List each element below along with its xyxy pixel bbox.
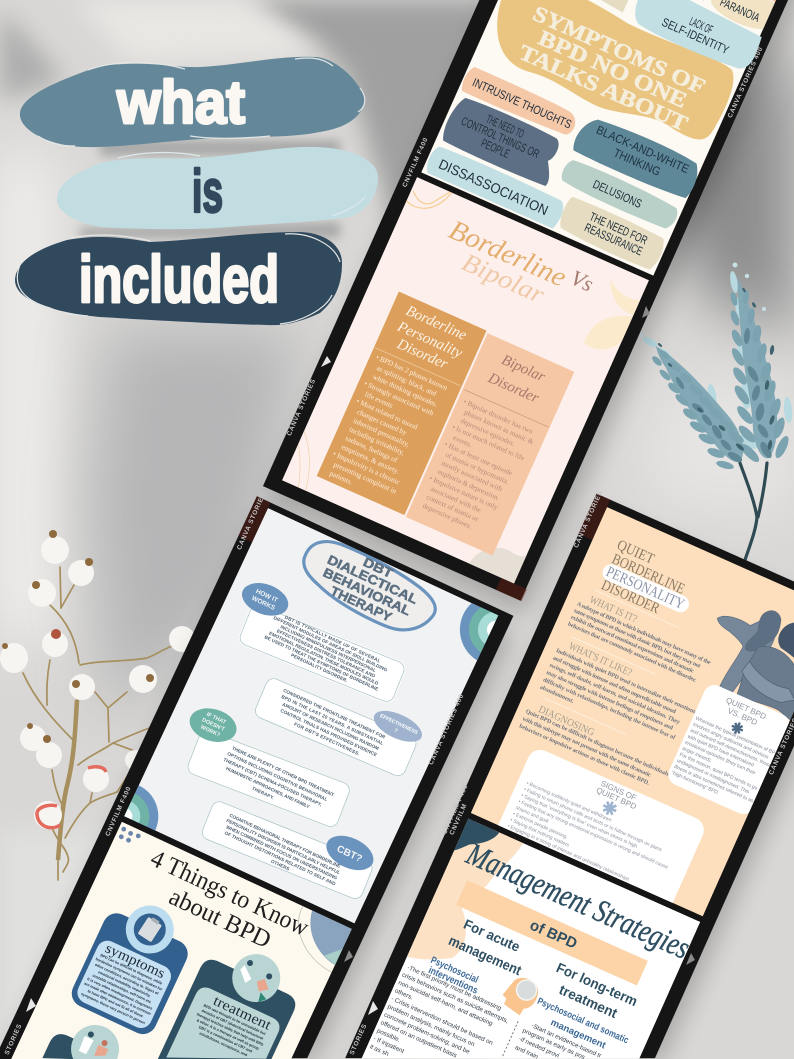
tag: the need to control things or people <box>439 93 566 188</box>
illustration: branch with white berries <box>0 530 195 880</box>
film strip: symptoms and borderline vs bipolar pages <box>258 0 794 616</box>
title <box>600 540 689 614</box>
card: treatment <box>158 933 310 1059</box>
pill: CBT: CBT? <box>335 844 364 865</box>
card: CBT: PERSONALITY DISORDER IS PARTICULARLY HELPFUL <box>226 818 341 875</box>
column: acute management: crisis behaviors such as suicide attempts, <box>401 971 510 1025</box>
section: diagnosing: DIAGNOSING <box>537 704 596 739</box>
tag: dissassociation <box>423 143 568 230</box>
panel: quiet borderline personality disorder <box>461 507 794 939</box>
card: quiet BPD vs BPD: and outward self-destructiveness, those <box>689 728 772 769</box>
column: borderline personality disorder: sadness, feelings of <box>344 434 399 465</box>
column: bipolar disorder: depressive phases. <box>421 502 473 531</box>
card: signs of quiet BPD: • Feeling that any strong emotional expression is wrong and should cause <box>517 799 669 871</box>
pill: effectiveness: ? <box>393 728 398 734</box>
section: what is it: WHAT IS IT? <box>588 595 639 625</box>
card: symptoms <box>67 889 202 1039</box>
card: quiet BPD vs BPD: VS. BPD <box>726 706 759 727</box>
pill: if that doesn't work <box>181 697 245 754</box>
card: signs of quiet BPD: • Saying that “everything is fine” even when stress is high <box>520 793 638 850</box>
column: borderline personality disorder <box>317 292 487 515</box>
column: borderline personality disorder: • Most related to mood <box>355 397 419 432</box>
tag: the need for reassurance: THE NEED FOR <box>587 209 650 248</box>
card: quiet BPD vs BPD: involves angry outbursts and obvious <box>692 722 770 761</box>
title: about BPD <box>165 883 275 954</box>
tag: black-and-white thinking <box>570 112 704 202</box>
card: effectiveness: FOR DBT'S EFFECTIVENESS. <box>293 722 361 757</box>
woman in front: torso <box>736 646 794 720</box>
card: symptoms: are made after adolescence, it is common <box>83 981 152 1016</box>
card: quiet BPD vs BPD: emotional episodes (they turn their <box>684 740 757 777</box>
card: how it works: INCLUDING MINDFULNESS INTERPERSONAL <box>280 624 377 673</box>
icon: clipboard <box>137 914 163 943</box>
column: borderline personality disorder: • Impulsivity is a chronic <box>332 450 401 487</box>
column: bipolar disorder: • Has at least one episode <box>443 440 514 477</box>
section: what's it like: difficulty with relationships, including the intense fear of <box>542 677 677 742</box>
column: borderline personality disorder: life events <box>364 390 394 410</box>
film strip edge labels: STORIES <box>4 1023 24 1056</box>
tag: the need for reassurance: REASSURANCE <box>582 220 645 258</box>
panel: DBT dialectical behavioral therapy <box>124 508 498 924</box>
column: acute management: - Crisis intervention should be based on <box>390 995 494 1047</box>
panel: borderline vs bipolar <box>282 177 649 584</box>
card: quiet BPD vs BPD: For this reason, quiet BPD tends to go <box>678 752 758 792</box>
band: of BPD <box>456 880 648 986</box>
card: signs of quiet BPD: SIGNS OF <box>599 779 638 803</box>
card: symptoms: other conditions, according to. Signs of <box>94 963 160 996</box>
column: bipolar disorder: associated with the <box>429 485 482 514</box>
title oval <box>302 540 437 632</box>
column: long-term treatment: -Start an evidence-based tr <box>530 1022 602 1059</box>
column: long-term treatment <box>515 962 636 1059</box>
card: if that doesn't work: THERAPY (CBT) SCHEMA-FOCUSED THERAPY, <box>223 757 323 807</box>
title: 4 Things to Know <box>146 845 313 942</box>
icon: therapy people <box>231 958 278 1005</box>
card: treatment: DBT is a combination of CBT and <box>198 1025 253 1054</box>
column: acute management: possible. <box>376 1027 402 1044</box>
blob with word: is: is <box>192 158 223 225</box>
card: treatment: therapy) teaches skills that help with BPD <box>196 1012 264 1047</box>
tag: dissassociation: DISSASSOCIATION <box>436 156 551 218</box>
tag: partly cropped beige <box>558 0 650 13</box>
column: acute management: concrete problem-solving, and be <box>383 1011 471 1056</box>
icon: head with brain <box>502 978 538 1016</box>
film strip edge labels: CANVA STORIES 400 <box>428 693 466 766</box>
column: bipolar disorder: of mania or hypomania, <box>444 451 510 486</box>
title blob: SYMPTOMS OF <box>529 1 709 99</box>
blob with word: included <box>15 232 342 325</box>
card: quiet BPD vs BPD <box>668 685 790 814</box>
title: BORDERLINE <box>609 551 687 598</box>
card: if that doesn't work: THERE ARE PLENTY OF OTHER BPD TREATMENT <box>231 746 335 798</box>
film strip edge labels: CNVFILM F400 <box>401 136 430 188</box>
blob with word: what <box>20 57 365 147</box>
film strip edge labels: CNVFILM <box>449 803 469 836</box>
pill: CBT <box>321 829 379 877</box>
column: borderline personality disorder: • Strongly associated with <box>363 380 435 418</box>
tag: the need to control things or people: THE NEED TO <box>484 112 526 141</box>
card: treatment: & other. It is a therapy as well as group <box>196 1018 260 1051</box>
card: symptoms: unstable relationships, self-harm etc. <box>92 973 152 1005</box>
card: signs of quiet BPD: • Extreme people pleasing <box>512 811 568 840</box>
card: if that doesn't work <box>167 697 361 839</box>
card: how it works: EMOTIONAL REGULATION. THESE MODULES WOULD <box>268 631 380 686</box>
column: bipolar disorder: • Is not much related to life <box>451 423 526 462</box>
tag: lack of self-identity <box>628 0 766 75</box>
card: if that doesn't work: THERAPY. <box>251 786 275 800</box>
tag: the need to control things or people: CONTROL THINGS OR <box>459 114 542 161</box>
card: how it works: PERSONALITY DISORDER. <box>290 653 348 683</box>
section: diagnosing: Quiet BPD can be difficult to diagnose because the individuals <box>525 709 670 778</box>
woman behind: raised arm and torso <box>716 610 776 692</box>
title: QUIET <box>614 537 657 568</box>
column: long-term treatment: -if needed provi <box>518 1036 560 1059</box>
tag: lack of self-identity: LACK OF <box>687 14 715 37</box>
card: quiet BPD vs BPD: QUIET BPD <box>725 696 768 721</box>
title: Vs <box>567 265 597 297</box>
card: effectiveness <box>255 678 422 776</box>
column: bipolar disorder: depressive episodes. <box>459 417 516 448</box>
pill: effectiveness: EFFECTIVENESS <box>379 713 419 736</box>
film strip edge labels: CANVA STORIES <box>236 492 267 551</box>
column: acute management: others. <box>394 987 414 1002</box>
column: bipolar disorder: phases known as manic & <box>463 408 535 446</box>
decoration: rainbow bottom left <box>124 785 158 830</box>
woman in front: hair <box>778 622 794 658</box>
tag: delusions: DELUSIONS <box>591 177 644 211</box>
column: borderline personality disorder: emptiness, & anxiety. <box>340 443 400 476</box>
title: Bipolar <box>458 247 550 310</box>
column: acute management: non-suicidal self-harm, and attacking <box>397 979 494 1028</box>
tag: lack of self-identity: SELF-IDENTITY <box>660 15 731 57</box>
section: what's it like: abandonment. <box>539 685 575 705</box>
section: diagnosing: with this subtype may not present with the same dramatic <box>521 716 652 779</box>
column: borderline personality disorder: as splitting: black, and <box>375 364 438 398</box>
card: quiet BPD vs BPD: anger inward). <box>681 746 713 764</box>
card: CBT: OTHERS <box>270 859 290 872</box>
film strip edge labels: CANVA STORIES <box>286 378 317 437</box>
woman in front: crossed arm <box>742 661 794 703</box>
card: treatment: decades of DBT (dialectical behavioral <box>201 1009 264 1041</box>
column: acute management: it as sh <box>369 1043 390 1058</box>
card: third topic <box>42 1009 131 1059</box>
card: signs of quiet BPD: • Failing to return phone calls and texts or to follow through on plans <box>523 787 663 853</box>
decoration: corner arcs and leaves <box>282 177 649 584</box>
column: acute management <box>370 919 522 1058</box>
card: CBT <box>198 778 382 909</box>
card: treatment: treatment <box>211 993 273 1034</box>
column: bipolar disorder: events. <box>452 434 473 449</box>
section: what's it like: and struggle with intense and often unpredictable mood <box>552 655 677 716</box>
card: CBT: COGNITIVE BEHAVIORAL THERAPY FOR BORDERLINE <box>229 813 341 869</box>
blob with word: included: included <box>79 242 279 316</box>
section: what's it like <box>540 642 696 740</box>
tag: black-and-white thinking: BLACK-AND-WHITE <box>594 123 691 176</box>
column: borderline personality disorder: Disorder <box>394 336 450 373</box>
tag: partly cropped teal <box>648 0 713 2</box>
title blob: BPD NO ONE <box>535 25 691 113</box>
card: signs of quiet BPD: QUIET BPD <box>595 786 638 811</box>
title oval: THERAPY <box>328 583 395 625</box>
card: symptoms: It is very often misdiagnosed. Diagnoses <box>87 977 153 1011</box>
decoration: rainbow top right <box>460 603 498 660</box>
column: bipolar disorder: Disorder <box>485 370 541 407</box>
card: quiet BPD vs BPD: “high-functioning” BPD. <box>670 770 720 796</box>
title oval: DBT <box>361 554 395 581</box>
title: Borderline <box>444 214 571 294</box>
pill: how it works: WORKS <box>250 595 277 612</box>
heading: what is included <box>15 57 378 325</box>
card: how it works: BE USED TO TREAT THE SYMPTOMS OF BORDERLINE <box>264 634 379 692</box>
card: symptoms: BPD can be difficult to diagnose, while <box>100 953 163 986</box>
panel: symptoms of BPD no one talks about <box>421 0 794 277</box>
title <box>447 220 592 300</box>
card: symptoms: to have BPD and not fit all of these <box>87 989 144 1018</box>
illustration: two women embracing <box>716 610 794 720</box>
decoration: dark corner blob <box>454 818 500 850</box>
section: what's it like: WHAT'S IT LIKE? <box>567 641 634 679</box>
tag: the need to control things or people: PEOPLE <box>479 136 512 161</box>
divider: dashed column line <box>502 1021 518 1057</box>
card: how it works: DIFFERENT MODULES OF AREAS OF SKILL BUILDING <box>273 615 388 673</box>
section: what's it like: may also struggle with intense feelings of emptiness and <box>545 670 674 732</box>
column: long-term treatment: For long-term <box>554 959 640 1009</box>
decoration: peach wash <box>407 818 523 960</box>
decoration: top-right shape <box>283 906 352 972</box>
film strip edge labels: CANVA STORIES 400 <box>727 46 765 119</box>
card: signs of quiet BPD: • Becoming suddenly quiet and withdrawn <box>525 780 613 824</box>
column: borderline personality disorder: • BPD has 2 phases known <box>375 353 449 392</box>
column: bipolar disorder: euphoria & depression. <box>436 468 501 502</box>
pill: effectiveness <box>369 704 427 748</box>
tag: partly cropped orange <box>729 0 785 2</box>
section: what is it: exhibit the outward emotional expressions and dramatic <box>570 615 695 675</box>
film strip edge labels: CNVFILM F400 <box>104 785 133 837</box>
column: borderline personality disorder: Personality <box>394 318 465 362</box>
column: bipolar disorder <box>406 333 574 555</box>
column: acute management: - If inpatient <box>372 1035 405 1055</box>
column: borderline personality disorder: including irritability, <box>348 426 406 457</box>
column: borderline personality disorder: inherited personality, <box>352 417 411 449</box>
section: what's it like: Individuals with quiet BPD tend to internalize their emotions <box>555 648 697 716</box>
column: bipolar disorder: mostly associated with <box>440 459 504 493</box>
card: effectiveness: BPD IN THE LAST 20 YEARS. A SUBSTANTIAL <box>281 694 384 746</box>
card: signs of quiet BPD <box>498 750 704 903</box>
card: how it works <box>239 583 406 703</box>
section: what is it: A subtype of BPD in which individuals may have many of the <box>576 601 712 666</box>
card: quiet BPD vs BPD: undiagnosed or misdiagnosed. This <box>676 758 751 796</box>
icon: gear star <box>731 722 744 734</box>
column: bipolar disorder: • Bipolar disorder has two <box>462 398 534 436</box>
card: quiet BPD vs BPD: Whereas the typical presentation of BPD <box>694 716 780 758</box>
blob with word: is <box>57 147 378 229</box>
pill: if that doesn't work: IF THAT <box>205 712 227 726</box>
tag: the need for reassurance <box>555 195 668 272</box>
card: signs of quiet BPD: • Saying that nothing matters <box>509 817 571 849</box>
column: acute management: management <box>446 932 524 978</box>
title: DISORDER <box>599 577 662 617</box>
card: if that doesn't work: HUMANISTIC APPROACHES, AND FAMILY <box>225 766 311 810</box>
pill: how it works <box>242 583 288 616</box>
card: effectiveness: CONTROL TRIALS HAS PROVIDED EVIDENCE <box>280 708 378 757</box>
blob with word: what: what <box>116 69 245 136</box>
column: long-term treatment: management <box>549 1017 608 1052</box>
section: what is it: behaviors that are commonly associated with the disorder. <box>567 622 698 684</box>
column: borderline personality disorder: presenting complaint in <box>332 461 398 496</box>
film strip: DBT and 4 things pages <box>0 474 544 1059</box>
section: diagnosing: behaviors or impulsive actions as those with classic BPD. <box>518 724 651 787</box>
title: PERSONALITY <box>604 564 687 613</box>
tag: delusions <box>558 157 681 232</box>
column: long-term treatment: Psychosocial and somatic <box>535 996 631 1046</box>
card: CBT: WHEN COMBINED WITH FOCUS ON UNDERSTANDING <box>225 825 338 881</box>
card: how it works: DBT IS TYPICALLY MADE UP OF SEVERAL <box>284 615 381 664</box>
illustration: blue lavender sprigs <box>639 262 793 560</box>
film strip: quiet BPD and management strategies pages <box>345 494 794 1059</box>
pill: how it works: HOW IT <box>254 588 279 604</box>
card: treatment: BPD was thought to be untreatable but <box>203 1004 267 1036</box>
column: acute management: Psychosocial <box>429 955 480 986</box>
section: what's it like: swings, self-doubt, self-harm, and suicidal ideation. They <box>548 663 681 726</box>
column: acute management: interventions <box>427 965 480 997</box>
card: how it works: EFFECTIVENESS DISTRESS TOLERANCE AND <box>276 628 376 679</box>
title oval: DIALECTICAL <box>325 552 420 607</box>
icon: gear star <box>602 801 617 816</box>
column: acute management: For acute <box>461 916 523 955</box>
tag: intrusive thoughts: INTRUSIVE THOUGHTS <box>470 75 574 132</box>
title oval: BEHAVIORAL <box>321 565 413 619</box>
panel: 4 things to know about BPD <box>11 822 352 1059</box>
column: bipolar disorder: • Impulsive nature is only <box>428 474 499 512</box>
tag: intrusive thoughts <box>459 65 580 139</box>
card: effectiveness: CONSIDERED THE FRONTLINE TREATMENT FOR <box>282 688 387 740</box>
section: what is it: same symptoms as those with classic BPD, but they may not <box>573 608 701 670</box>
decoration: top-left dots <box>117 826 141 846</box>
card: symptoms: emotional instability, impulsivity, <box>97 970 151 998</box>
card: symptoms: symptoms; these vary person to person <box>80 992 146 1025</box>
pill: if that doesn't work: WORK? <box>199 724 221 739</box>
film strip edge labels: CNVFILM F400 <box>441 783 470 835</box>
column: acute management: offered on an outpatient basis <box>379 1019 458 1059</box>
column: acute management: -The first priority must be addressing <box>406 964 503 1012</box>
card: effectiveness: AMOUNT OF RESEARCH INCLUDING RANDOM <box>281 702 380 751</box>
card: signs of quiet BPD: • Engaging in a string of intense and unhealthy relationships <box>506 823 631 883</box>
column: borderline personality disorder: Borderline <box>403 303 469 344</box>
tag: black-and-white thinking: THINKING <box>611 146 663 179</box>
film strip edge labels: CANVA STORIES <box>573 490 604 549</box>
column: long-term treatment: treatment <box>557 981 620 1021</box>
card: treatment: mindfulness, acceptance, and <box>199 1031 248 1058</box>
woman behind: hair <box>745 610 782 652</box>
panel: management strategies of BPD <box>361 819 700 1059</box>
title: Management Strategies <box>461 835 695 966</box>
band: of BPD: of BPD <box>527 917 580 953</box>
woman in front: face <box>786 633 794 671</box>
card: symptoms: borderline symptoms can be mistaken for <box>95 957 163 992</box>
card: if that doesn't work: OPTIONS INCLUDING COGNITIVE BEHAVIORAL <box>226 751 328 802</box>
card: quiet BPD vs BPD: with quiet BPD have internalized <box>686 734 755 769</box>
column: bipolar disorder: Bipolar <box>499 352 548 385</box>
film strip edge labels: STORIES <box>349 1023 369 1056</box>
card: CBT: OF THOUGHT DISTORTIONS RELATED TO SELF AND <box>224 830 337 887</box>
title blob: TALKS ABOUT <box>515 39 692 136</box>
column: borderline personality disorder: white thinking episodes. <box>371 373 439 409</box>
column: borderline personality disorder: patients. <box>328 469 354 487</box>
column: borderline personality disorder: changes caused by <box>356 408 408 437</box>
icon: support group <box>78 1030 112 1059</box>
title blob <box>478 0 746 154</box>
column: acute management: problem analysis, mainly focus on <box>386 1003 476 1048</box>
pill: if that doesn't work: DOESN'T <box>201 717 226 733</box>
card: signs of quiet BPD: shame and guilt <box>515 805 550 825</box>
card: quiet BPD vs BPD: illness is also sometimes referred to as <box>673 764 755 805</box>
card: symptoms: symptoms <box>103 940 168 982</box>
column: bipolar disorder: context of mania or <box>425 493 480 524</box>
